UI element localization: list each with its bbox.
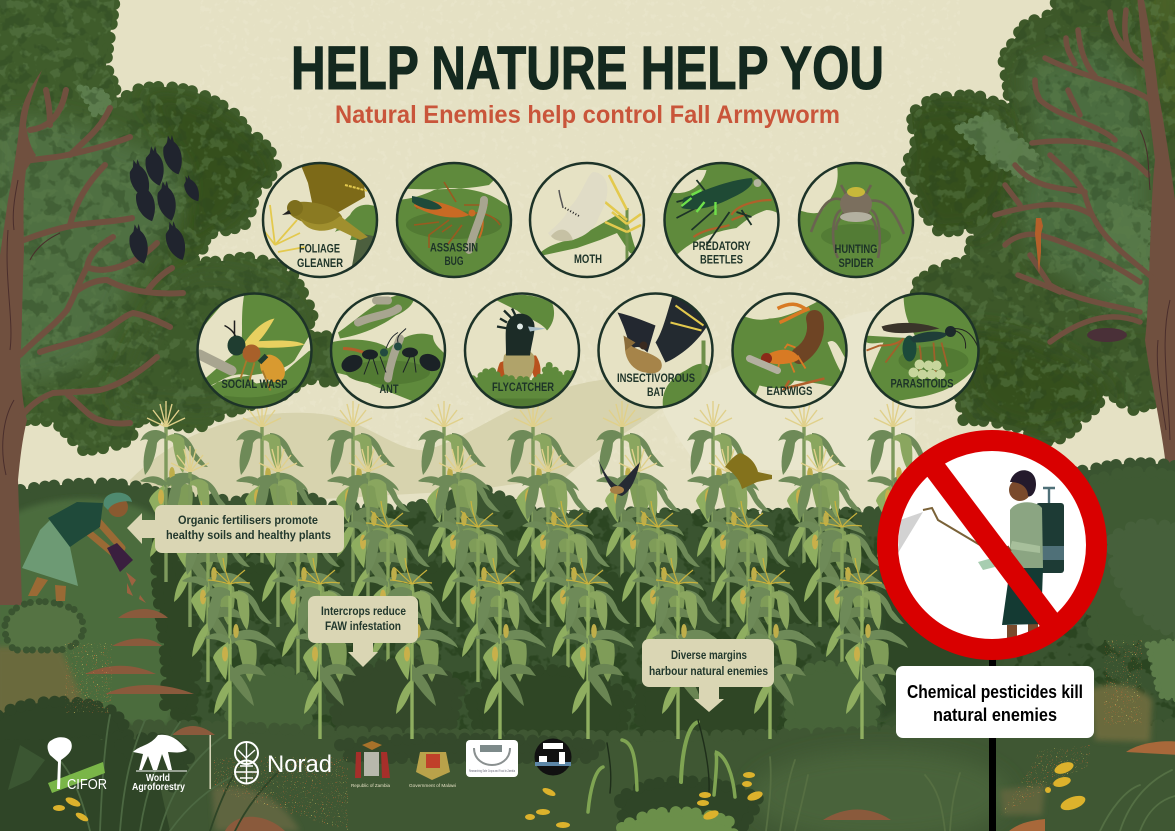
- icon: bird in field: [725, 453, 772, 489]
- logo: ZARI: [466, 740, 518, 777]
- arrow: down to intercrops: [348, 642, 378, 667]
- callout: organic fertilisers: healthy soils and healthy plants: [166, 530, 331, 542]
- farmer applying organic fertiliser: [22, 493, 146, 603]
- yellow flowers: [53, 760, 1087, 828]
- label: earwigs: EARWIGS: [766, 386, 813, 398]
- callout: intercrops: Intercrops reduce: [321, 606, 406, 618]
- maize row 1: [140, 401, 939, 582]
- logo: Republic of Zambia: [351, 741, 390, 788]
- panel: social wasp: [194, 292, 312, 408]
- arrow: left to farmer: [127, 513, 156, 544]
- logo: CIFOR: CIFOR: [67, 776, 107, 793]
- tree canopy: left: [0, 0, 340, 450]
- bushes behind maize row 4: [225, 664, 880, 735]
- tree trunk and branches: left: [0, 70, 183, 605]
- callout: organic fertilisers: [127, 505, 344, 553]
- title: HELP NATURE HELP YOU: [291, 34, 884, 102]
- label: foliage gleaner: GLEANER: [297, 258, 344, 270]
- icon: bat in field: [598, 459, 640, 496]
- label: insectivorous bat: INSECTIVOROUS: [617, 373, 695, 385]
- subtitle: Natural Enemies help control Fall Armyworm: [335, 101, 840, 129]
- logos: [48, 735, 572, 793]
- maize row 3: [182, 501, 888, 682]
- label: chemical pesticides: Chemical pesticides kill: [907, 682, 1083, 702]
- icon: backpack sprayer: [1035, 488, 1064, 573]
- panel: flycatcher: [464, 292, 580, 408]
- label: social wasp: SOCIAL WASP: [222, 379, 288, 391]
- label: hunting spider: SPIDER: [838, 258, 874, 270]
- tree trunk and branches: right: [995, 0, 1175, 480]
- icon: flycatcher: [496, 308, 546, 380]
- panel: predatory beetles: [664, 162, 782, 280]
- label: hunting spider: [834, 244, 878, 270]
- panel: ant: [330, 292, 446, 408]
- icon: assassin bug: [412, 182, 500, 248]
- grasses: [55, 715, 1175, 831]
- label: assassin bug: [430, 242, 478, 268]
- speckles: [65, 640, 1142, 831]
- callout: diverse margins: Diverse margins: [671, 650, 747, 662]
- soil patches: [0, 647, 1152, 831]
- logo: round seal: [534, 738, 572, 776]
- label: chemical pesticides: natural enemies: [933, 705, 1057, 725]
- icon: ants: [339, 328, 443, 375]
- icon: nest on branch: [1087, 328, 1127, 342]
- bush by field edge: [5, 602, 83, 650]
- foreground ground band: [0, 722, 1175, 831]
- label: predatory beetles: BEETLES: [700, 254, 743, 266]
- callout: diverse margins: [642, 639, 774, 712]
- farmer with sprayer: [898, 470, 1064, 642]
- logo: ZARI: Researching Safe Crops and Food in Zambia: [469, 769, 515, 773]
- prohibition ring: [888, 440, 1096, 650]
- icon: predatory beetle: [676, 178, 762, 245]
- logo: World Agroforestry: Agroforestry: [132, 782, 185, 793]
- tree canopy: right: [900, 0, 1175, 443]
- right tree: [900, 0, 1175, 480]
- arrow: down to margins: [694, 686, 724, 712]
- icon: bat: [618, 292, 708, 373]
- icon: roosting bats: [127, 134, 202, 265]
- icon: moth: [551, 190, 606, 242]
- label: moth: MOTH: [574, 254, 602, 266]
- soil mounds: [85, 609, 1175, 831]
- logo: Norad: Norad: [267, 751, 332, 778]
- front plant bushes: [620, 781, 760, 831]
- panel: assassin bug: [394, 162, 514, 278]
- logo: World Agroforestry: [132, 735, 187, 793]
- label: ant: ANT: [380, 384, 398, 396]
- panel: moth: [529, 162, 645, 280]
- callout: diverse margins: harbour natural enemies: [649, 666, 768, 678]
- label: chemical pesticides: [896, 666, 1094, 738]
- label: insectivorous bat: [617, 373, 695, 399]
- label: predatory beetles: PREDATORY: [692, 241, 751, 253]
- front left bushes: [0, 702, 190, 831]
- bushes behind maize row 2: [200, 568, 870, 624]
- no pesticides sign: [888, 440, 1096, 831]
- icon: social wasp: [200, 318, 304, 390]
- sign post: [989, 655, 996, 831]
- icon: hunting spider: [811, 185, 904, 258]
- callout: organic fertilisers: Organic fertilisers promote: [178, 515, 318, 527]
- icon: parasitoid wasp: [882, 323, 978, 372]
- label: assassin bug: BUG: [444, 256, 464, 268]
- icon: eggs: [908, 360, 946, 380]
- icon: earwig: [750, 304, 816, 372]
- label: parasitoids: PARASITOIDS: [890, 378, 954, 390]
- callout: intercrops: FAW infestation: [325, 621, 401, 633]
- logo: Government of Malawi: [409, 752, 456, 788]
- label: hunting spider: HUNTING: [834, 244, 878, 256]
- logo: World Agroforestry: World: [146, 773, 170, 784]
- ground and back bushes: [0, 463, 1175, 831]
- label: insectivorous bat: BAT: [647, 387, 665, 399]
- striped plants: [588, 720, 735, 812]
- icon: flycatcher on branch: [1035, 218, 1043, 274]
- maize row 2: [164, 446, 866, 627]
- left tree: [0, 0, 340, 605]
- logo: Republic of Zambia: Republic of Zambia: [351, 783, 390, 788]
- label: assassin bug: ASSASSIN: [430, 242, 478, 254]
- label: flycatcher: FLYCATCHER: [492, 382, 555, 394]
- panel: earwigs: [732, 292, 850, 410]
- callout: intercrops: [308, 596, 418, 667]
- icon: caterpillars: [358, 300, 400, 378]
- logo: Norad: [235, 742, 332, 784]
- background hills: [130, 311, 915, 510]
- panel: insectivorous bat: [598, 292, 714, 410]
- label: predatory beetles: [692, 241, 751, 266]
- maize row 4: [204, 558, 908, 739]
- panel: foliage gleaner: [262, 162, 378, 278]
- icon: bird: [282, 163, 368, 240]
- label: foliage gleaner: FOLIAGE: [299, 244, 340, 256]
- logo: CIFOR: [48, 737, 107, 793]
- logo: Government of Malawi: Government of Malawi: [409, 783, 456, 788]
- panel: hunting spider: [798, 162, 914, 278]
- panel: parasitoids: [864, 292, 982, 410]
- label: foliage gleaner: [297, 244, 344, 270]
